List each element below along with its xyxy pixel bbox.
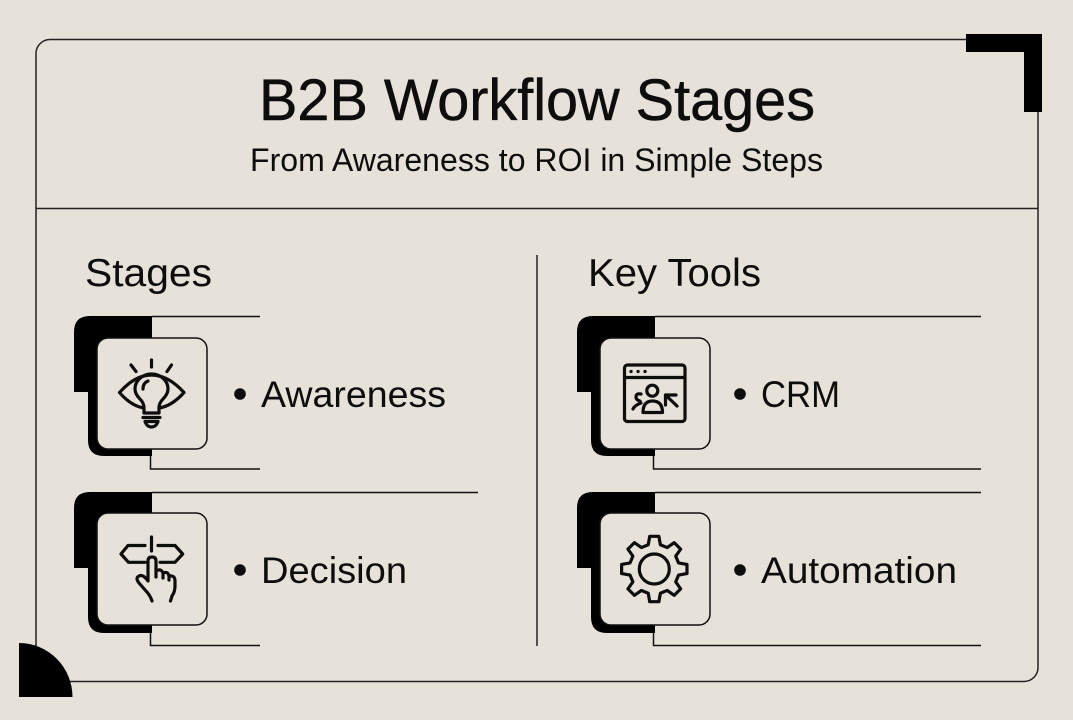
title: B2B Workflow Stages xyxy=(259,68,815,133)
heading: Stages: Stages xyxy=(85,252,212,295)
card: Automation xyxy=(577,492,981,646)
bullet xyxy=(234,564,246,576)
bullet xyxy=(734,564,746,576)
subtitle: From Awareness to ROI in Simple Steps xyxy=(250,142,823,178)
heading: Key Tools: Key Tools xyxy=(588,252,761,295)
icon: signpost with pointing hand xyxy=(121,537,183,601)
label: Automation: Automation xyxy=(761,550,957,591)
card: Awareness xyxy=(74,316,446,469)
corner accent: bottom left quarter circle xyxy=(19,643,72,697)
label: CRM: CRM xyxy=(761,374,840,415)
bullet xyxy=(234,388,246,400)
bullet xyxy=(734,388,746,400)
card: CRM xyxy=(577,316,981,469)
card: Decision xyxy=(74,492,478,646)
corner accent: top right xyxy=(966,34,1042,112)
header divider xyxy=(36,208,1038,210)
label: Decision: Decision xyxy=(261,550,407,591)
icon: eye with light bulb xyxy=(120,360,184,427)
column divider xyxy=(536,255,538,646)
icon: gear xyxy=(622,536,687,602)
icon: browser window with user and cursor xyxy=(624,365,685,422)
label: Awareness: Awareness xyxy=(261,374,446,415)
